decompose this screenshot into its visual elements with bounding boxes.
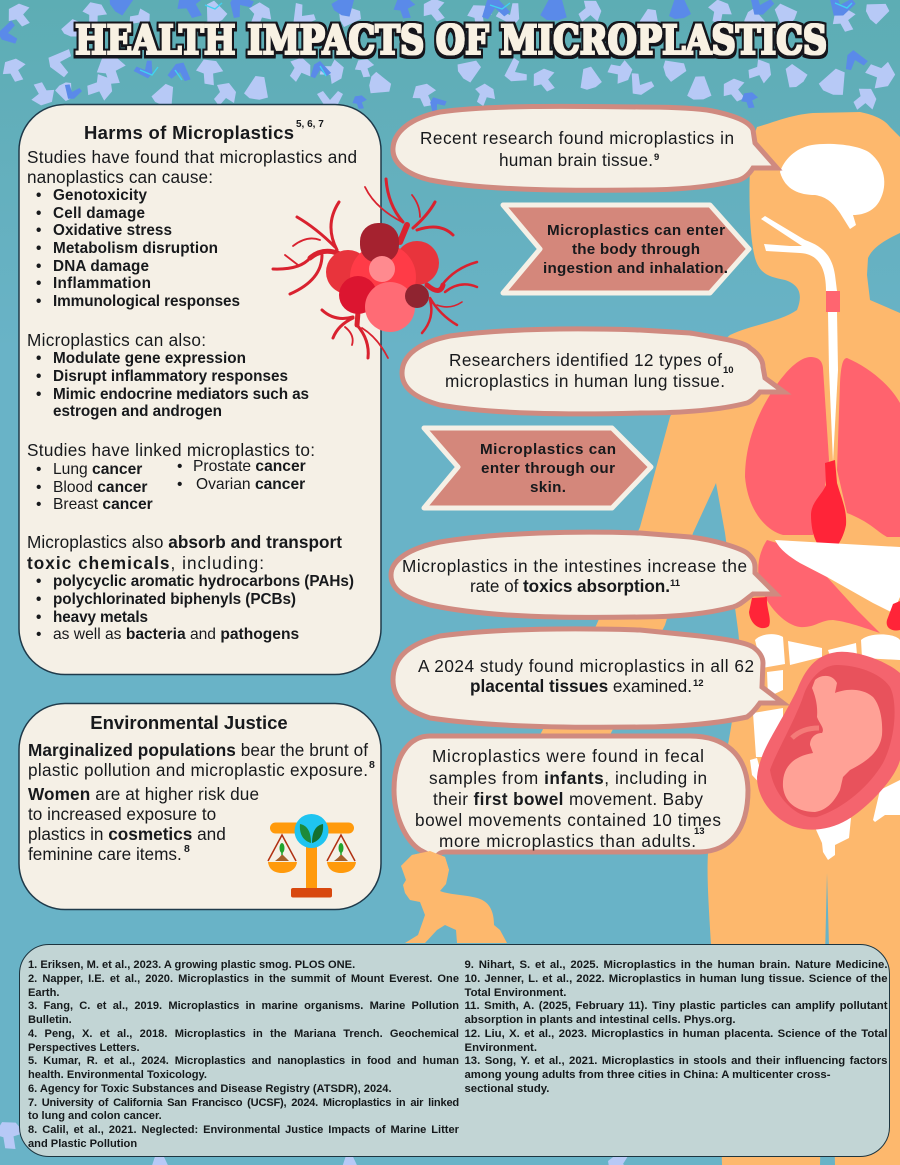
callout: intestines: 11 bbox=[670, 578, 681, 589]
text: harms list bbox=[27, 147, 357, 643]
left lung bbox=[745, 357, 829, 535]
text: environmental justice bbox=[28, 740, 375, 864]
text: harms list: • bbox=[36, 187, 41, 204]
references column 1: 8. Calil, et al., 2021. Neglected: Environmental Justice Impacts of Marine Litter bbox=[28, 1124, 459, 1136]
superscript: harms references: 5, 6, 7 bbox=[296, 119, 324, 130]
callout: brain bbox=[393, 106, 777, 190]
text: harms list: Inflammation bbox=[53, 275, 151, 292]
references column 1 bbox=[28, 959, 459, 1150]
callout: infants: samples from infants, including in bbox=[429, 768, 707, 788]
text: harms list: polycyclic aromatic hydrocarbons (PAHs) bbox=[53, 573, 354, 590]
references column 2: Total Environment. bbox=[464, 986, 566, 998]
text: harms list: DNA damage bbox=[53, 258, 149, 275]
text: harms list: heavy metals bbox=[53, 609, 148, 626]
heading: harms: Harms of Microplastics bbox=[84, 122, 294, 143]
references column 1: 3. Fang, C. et al., 2019. Microplastics in marine organisms. Marine Pollution bbox=[28, 1000, 459, 1012]
organs bbox=[745, 144, 900, 860]
references column 2: 12. Liu, X. et al., 2023. Microplastics in human placenta. Science of the Total bbox=[464, 1028, 888, 1040]
references column 2: 9. Nihart, S. et al., 2025. Microplastics in the human brain. Nature Medicine. bbox=[464, 959, 888, 971]
callout: placenta: 12 bbox=[693, 678, 704, 689]
references column 1: 5. Kumar, R. et al., 2024. Microplastics and nanoplastics in food and human bbox=[28, 1055, 459, 1067]
intestines bbox=[750, 634, 900, 860]
text: harms list: • bbox=[36, 461, 41, 478]
arrow: skin: skin. bbox=[530, 479, 566, 496]
references column 2: Environment. bbox=[464, 1042, 537, 1054]
text: harms list: Breast cancer bbox=[53, 496, 153, 513]
callout: brain: human brain tissue. bbox=[499, 150, 653, 170]
text: environmental justice: plastic pollution and microplastic exposure. bbox=[28, 760, 368, 780]
text: harms list: • bbox=[36, 368, 41, 385]
text: environmental justice: Women are at higher risk due bbox=[28, 784, 259, 804]
liver bbox=[775, 540, 900, 613]
text: harms list: polychlorinated biphenyls (PCBs) bbox=[53, 591, 296, 608]
callout: infants: 13 bbox=[694, 826, 705, 837]
callout: infants: Microplastics were found in fecal bbox=[432, 746, 704, 766]
text: harms list: • bbox=[36, 222, 41, 239]
panel: harms of microplastics bbox=[19, 104, 381, 674]
arrow: skin: enter through our bbox=[481, 460, 615, 477]
text: harms list: • bbox=[36, 258, 41, 275]
uterus bbox=[757, 652, 900, 830]
callout: infants: their first bowel movement. Baby bbox=[433, 789, 703, 809]
callout: intestines bbox=[391, 532, 776, 617]
text: harms list: Genotoxicity bbox=[53, 187, 147, 204]
references column 2: absorption in plants and intestinal cells. Phys.org. bbox=[464, 1014, 736, 1026]
kidneys bbox=[749, 597, 900, 631]
callout: placenta: A 2024 study found microplastics in all 62 bbox=[418, 656, 754, 676]
text: harms list: • bbox=[36, 496, 41, 513]
references column 1: to lung and colon cancer. bbox=[28, 1110, 162, 1122]
text: harms list: • bbox=[36, 386, 41, 403]
text: harms list: estrogen and androgen bbox=[53, 403, 222, 420]
callout: placenta: placental tissues examined. bbox=[470, 676, 692, 696]
text: environmental justice: Marginalized populations bear the brunt of bbox=[28, 740, 368, 760]
references column 2: 10. Jenner, L. et al., 2022. Microplastics in human lung tissue. Science of the bbox=[464, 973, 888, 985]
callout: brain: 9 bbox=[654, 152, 659, 163]
references column 2 bbox=[464, 959, 888, 1095]
references column 2: 13. Song, Y. et al., 2021. Microplastics in stools and their influencing factors bbox=[464, 1055, 888, 1067]
text: environmental justice: plastics in cosmetics and bbox=[28, 824, 226, 844]
callout: lung: Researchers identified 12 types of bbox=[449, 350, 722, 370]
callout: placenta bbox=[393, 629, 783, 727]
references column 1: Perspectives Letters. bbox=[28, 1042, 140, 1054]
references column 1: and Plastic Pollution bbox=[28, 1138, 137, 1150]
text: harms list: Lung cancer bbox=[53, 461, 142, 478]
text: harms list: • bbox=[36, 275, 41, 292]
text: harms list: nanoplastics can cause: bbox=[27, 167, 213, 187]
text: harms list: • bbox=[177, 458, 182, 475]
text: harms list: Mimic endocrine mediators such as bbox=[53, 386, 309, 403]
text: environmental justice: to increased exposure to bbox=[28, 804, 216, 824]
larynx bbox=[826, 291, 840, 312]
text: harms list: Microplastics can also: bbox=[27, 330, 206, 350]
callout: infants: more microplastics than adults. bbox=[439, 831, 696, 851]
panel: references bbox=[19, 944, 890, 1157]
references column 1: 4. Peng, X. et al., 2018. Microplastics in the Mariana Trench. Geochemical bbox=[28, 1028, 459, 1040]
right lung bbox=[837, 358, 900, 537]
text: harms list: • bbox=[36, 350, 41, 367]
text: harms list: • bbox=[177, 476, 182, 493]
icon: justice scale with leaves bbox=[268, 814, 356, 898]
baby head over callout bbox=[401, 851, 449, 880]
umbilical cord bbox=[792, 728, 819, 738]
baby silhouette bbox=[401, 851, 507, 943]
fetus bbox=[783, 676, 882, 812]
callout: infants: bowel movements contained 10 times bbox=[415, 810, 721, 830]
references column 1: 6. Agency for Toxic Substances and Disease Registry (ATSDR), 2024. bbox=[28, 1083, 392, 1095]
text: environmental justice: 8 bbox=[369, 759, 375, 771]
text: harms list: • bbox=[36, 591, 41, 608]
callout: intestines: rate of toxics absorption. bbox=[470, 576, 670, 596]
stomach bbox=[758, 540, 880, 633]
text: harms list: Prostate cancer bbox=[193, 458, 306, 475]
references column 2: 11. Smith, A. (2025, February 11). Tiny plastic particles can amplify pollutant bbox=[464, 1000, 888, 1012]
arrow: skin: Microplastics can bbox=[480, 441, 616, 458]
callout: infants bbox=[394, 736, 748, 858]
heart bbox=[811, 460, 846, 552]
text: harms list: toxic chemicals, including: bbox=[27, 553, 264, 573]
arrow: ingestion and inhalation bbox=[503, 205, 749, 293]
callout: intestines: Microplastics in the intestines increase the bbox=[402, 556, 747, 576]
text: harms list: Oxidative stress bbox=[53, 222, 172, 239]
brain bbox=[780, 144, 884, 229]
text: harms list: • bbox=[36, 573, 41, 590]
text: environmental justice: feminine care items. bbox=[28, 844, 182, 864]
callout: lung: 10 bbox=[723, 365, 734, 376]
references column 2: among young adults from three cities in China: A multicenter cross- bbox=[464, 1069, 830, 1081]
text: harms list: Studies have linked microplastics to: bbox=[27, 440, 315, 460]
text: harms list: • bbox=[36, 626, 41, 643]
callout: brain: Recent research found microplastics in bbox=[420, 128, 734, 148]
text: harms list: • bbox=[36, 205, 41, 222]
references column 1: Bulletin. bbox=[28, 1014, 72, 1026]
airway bbox=[761, 216, 837, 291]
text: harms list: Studies have found that microplastics and bbox=[27, 147, 357, 167]
icon: cancer cell cluster bbox=[273, 179, 477, 358]
arrow: ingestion and inhalation: ingestion and inhalation. bbox=[543, 260, 728, 277]
text: environmental justice: 8 bbox=[184, 843, 190, 855]
text: harms list: Ovarian cancer bbox=[196, 476, 305, 493]
text: harms list: Immunological responses bbox=[53, 293, 240, 310]
text: harms list: Microplastics also absorb and transport bbox=[27, 532, 342, 552]
text: harms list: • bbox=[36, 240, 41, 257]
arrow: ingestion and inhalation: the body through bbox=[572, 241, 700, 258]
references column 1: 7. University of California San Francisco (UCSF), 2024. Microplastics in air linked bbox=[28, 1096, 459, 1108]
text: harms list: as well as bacteria and pathogens bbox=[53, 626, 299, 643]
heading: environmental justice: Environmental Justice bbox=[90, 712, 288, 733]
references column 1: health. Environmental Toxicology. bbox=[28, 1069, 207, 1081]
references column 1: 2. Napper, I.E. et al., 2020. Microplastics in the summit of Mount Everest. One bbox=[28, 973, 459, 985]
text: harms list: Cell damage bbox=[53, 205, 145, 222]
human body silhouette bbox=[540, 112, 900, 1165]
callout: lung: microplastics in human lung tissue. bbox=[445, 371, 725, 391]
references column 1: Earth. bbox=[28, 986, 59, 998]
arrow: ingestion and inhalation: Microplastics can enter bbox=[547, 222, 725, 239]
arrow: skin bbox=[424, 428, 651, 508]
text: harms list: Metabolism disruption bbox=[53, 240, 218, 257]
text: harms list: • bbox=[36, 293, 41, 310]
text: harms list: Blood cancer bbox=[53, 479, 148, 496]
text: harms list: • bbox=[36, 609, 41, 626]
text: harms list: Disrupt inflammatory responses bbox=[53, 368, 288, 385]
trachea bbox=[828, 312, 838, 462]
panel: environmental justice bbox=[19, 704, 381, 910]
references column 1: 1. Eriksen, M. et al., 2023. A growing plastic smog. PLOS ONE. bbox=[28, 959, 355, 971]
text: harms list: Modulate gene expression bbox=[53, 350, 246, 367]
text: harms list: • bbox=[36, 479, 41, 496]
references column 2: sectional study. bbox=[464, 1083, 549, 1095]
callout: lung bbox=[402, 329, 784, 414]
